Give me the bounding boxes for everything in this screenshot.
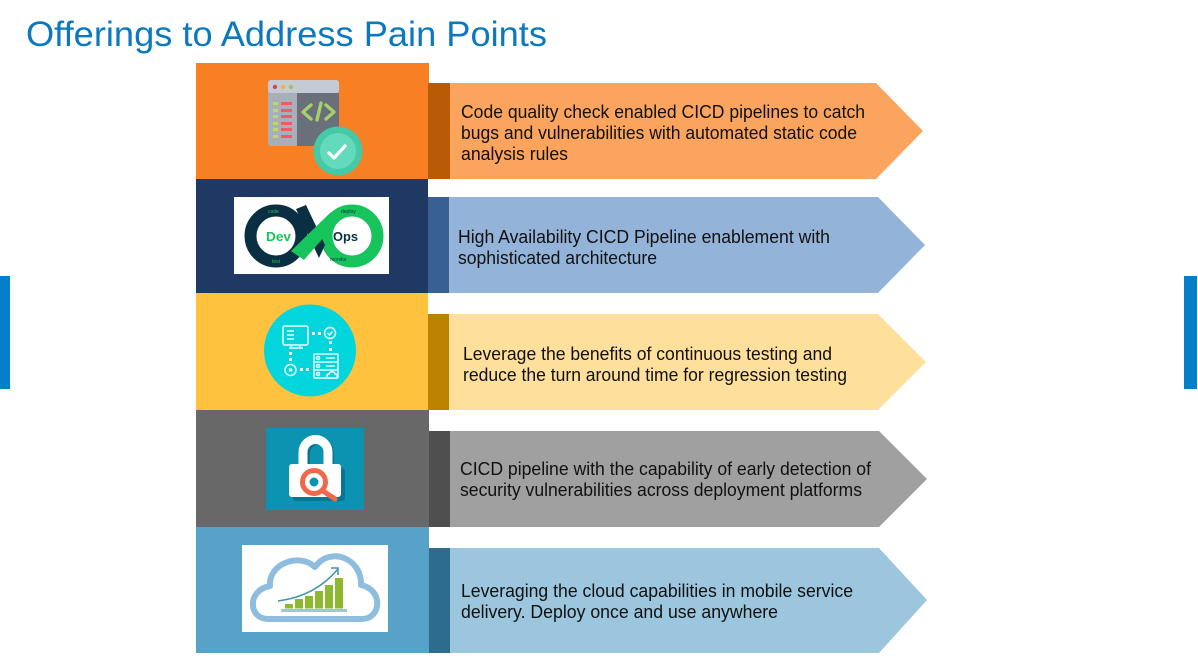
icon: DevOps infinity loop: Ops <box>333 230 358 244</box>
text: cloud delivery: Leveraging the cloud capabilities in mobile service <box>461 581 853 601</box>
text: continuous testing: Leverage the benefits of continuous testing and <box>463 344 832 364</box>
text: security detection: security vulnerabilities across deployment platforms <box>460 480 862 500</box>
icon: padlock with magnifier <box>266 428 364 510</box>
right side accent bar <box>1184 276 1197 389</box>
text: security detection <box>460 459 872 500</box>
icon: DevOps infinity loop <box>234 197 389 274</box>
panel: security detection row <box>196 410 927 527</box>
icon: DevOps infinity loop: test <box>272 259 281 265</box>
text: high availability: sophisticated architecture <box>458 248 657 268</box>
panel: high availability row <box>196 179 925 293</box>
text: code quality: analysis rules <box>461 144 568 164</box>
text: cloud delivery: delivery. Deploy once and use anywhere <box>461 602 778 622</box>
icon: code window with check badge <box>268 80 362 176</box>
icon: DevOps infinity loop: code <box>268 209 279 215</box>
text: high availability <box>458 227 830 268</box>
text: continuous testing: reduce the turn around time for regression testing <box>463 365 847 385</box>
icon: DevOps infinity loop: deploy <box>341 209 356 215</box>
panel: code quality row <box>196 63 923 179</box>
icon: DevOps infinity loop: monitor <box>330 257 347 263</box>
text: cloud delivery <box>461 581 853 622</box>
text: security detection: CICD pipeline with the capability of early detection of <box>460 459 872 479</box>
text: code quality <box>461 102 865 164</box>
icon: testing workflow circle <box>264 304 356 396</box>
text: high availability: High Availability CICD Pipeline enablement with <box>458 227 830 247</box>
title: Offerings to Address Pain Points <box>26 15 547 54</box>
panel: continuous testing row <box>196 293 926 410</box>
icon: DevOps infinity loop: Dev <box>266 230 291 244</box>
left side accent bar <box>0 276 10 389</box>
panel: cloud delivery row <box>196 527 927 653</box>
text: continuous testing <box>463 344 847 385</box>
icon: cloud with growth chart <box>242 545 388 632</box>
text: code quality: Code quality check enabled CICD pipelines to catch <box>461 102 865 122</box>
text: code quality: bugs and vulnerabilities with automated static code <box>461 123 857 143</box>
